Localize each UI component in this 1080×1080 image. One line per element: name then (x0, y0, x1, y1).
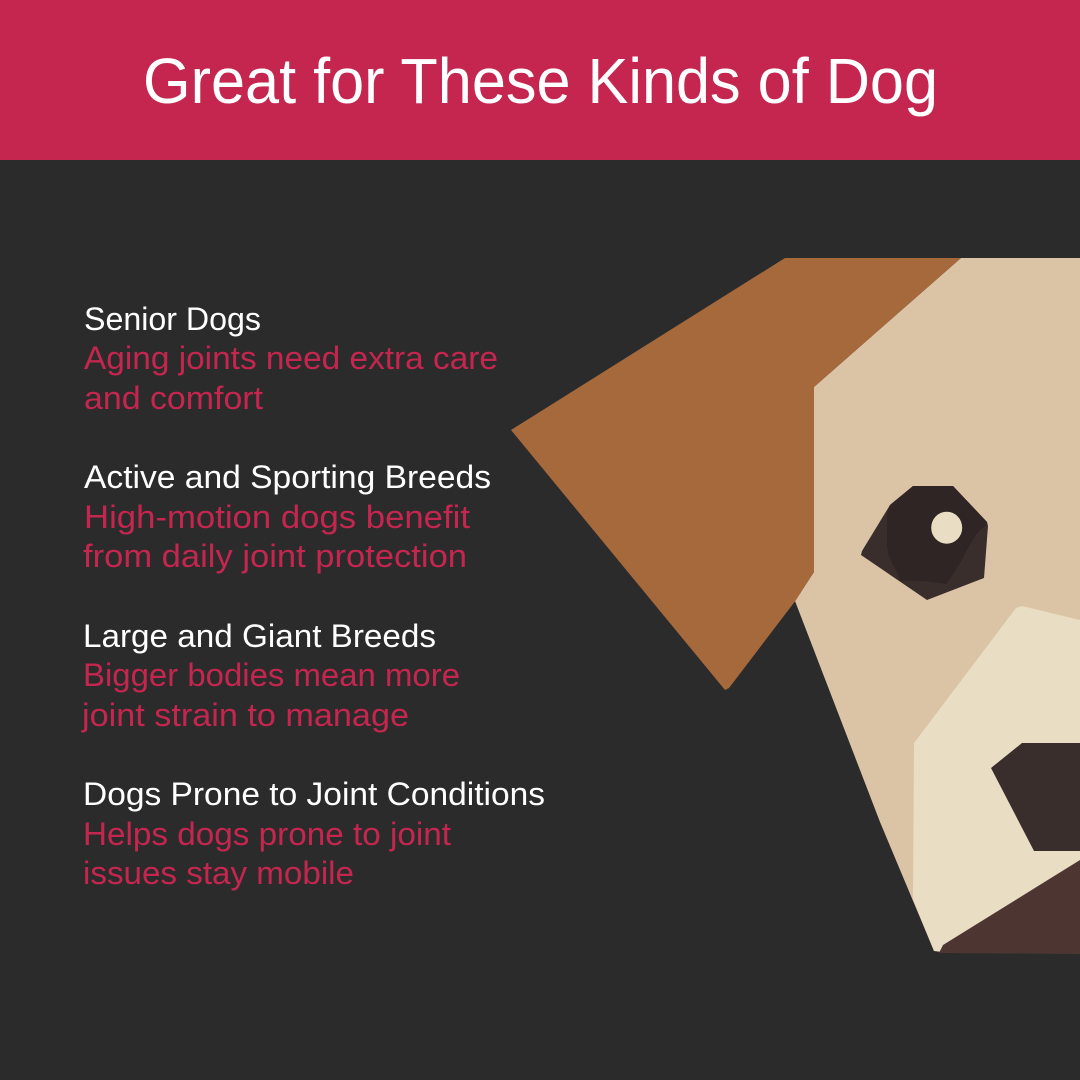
item: active and sporting breeds: Active and Sporting Breeds (84, 459, 491, 495)
item: active and sporting breeds: from daily joint protection (83, 538, 467, 574)
item: senior dogs: Senior Dogs (84, 301, 261, 337)
item: large and giant breeds: joint strain to manage (81, 697, 409, 733)
item: dogs prone to joint conditions: Helps dogs prone to joint (83, 816, 451, 852)
item: active and sporting breeds (83, 459, 491, 574)
dog face (795, 258, 1080, 951)
item: dogs prone to joint conditions: issues stay mobile (83, 855, 354, 891)
item: active and sporting breeds: High-motion dogs benefit (84, 499, 470, 535)
title: Great for These Kinds of Dog (143, 45, 938, 117)
list of dog types (81, 301, 545, 891)
item: large and giant breeds (81, 618, 460, 733)
item: large and giant breeds: Large and Giant Breeds (83, 618, 436, 654)
item: senior dogs (84, 301, 498, 416)
dog muzzle (913, 606, 1080, 952)
item: dogs prone to joint conditions: Dogs Prone to Joint Conditions (83, 776, 545, 812)
item: senior dogs: Aging joints need extra care (84, 340, 498, 376)
item: large and giant breeds: Bigger bodies mean more (83, 657, 460, 693)
dog ear (511, 258, 961, 690)
item: dogs prone to joint conditions (83, 776, 545, 891)
dog nose (991, 743, 1080, 851)
dog mouth (939, 860, 1080, 954)
header band (0, 0, 1080, 160)
item: senior dogs: and comfort (84, 380, 263, 416)
dog illustration (511, 258, 1080, 954)
dog eye (861, 486, 988, 600)
